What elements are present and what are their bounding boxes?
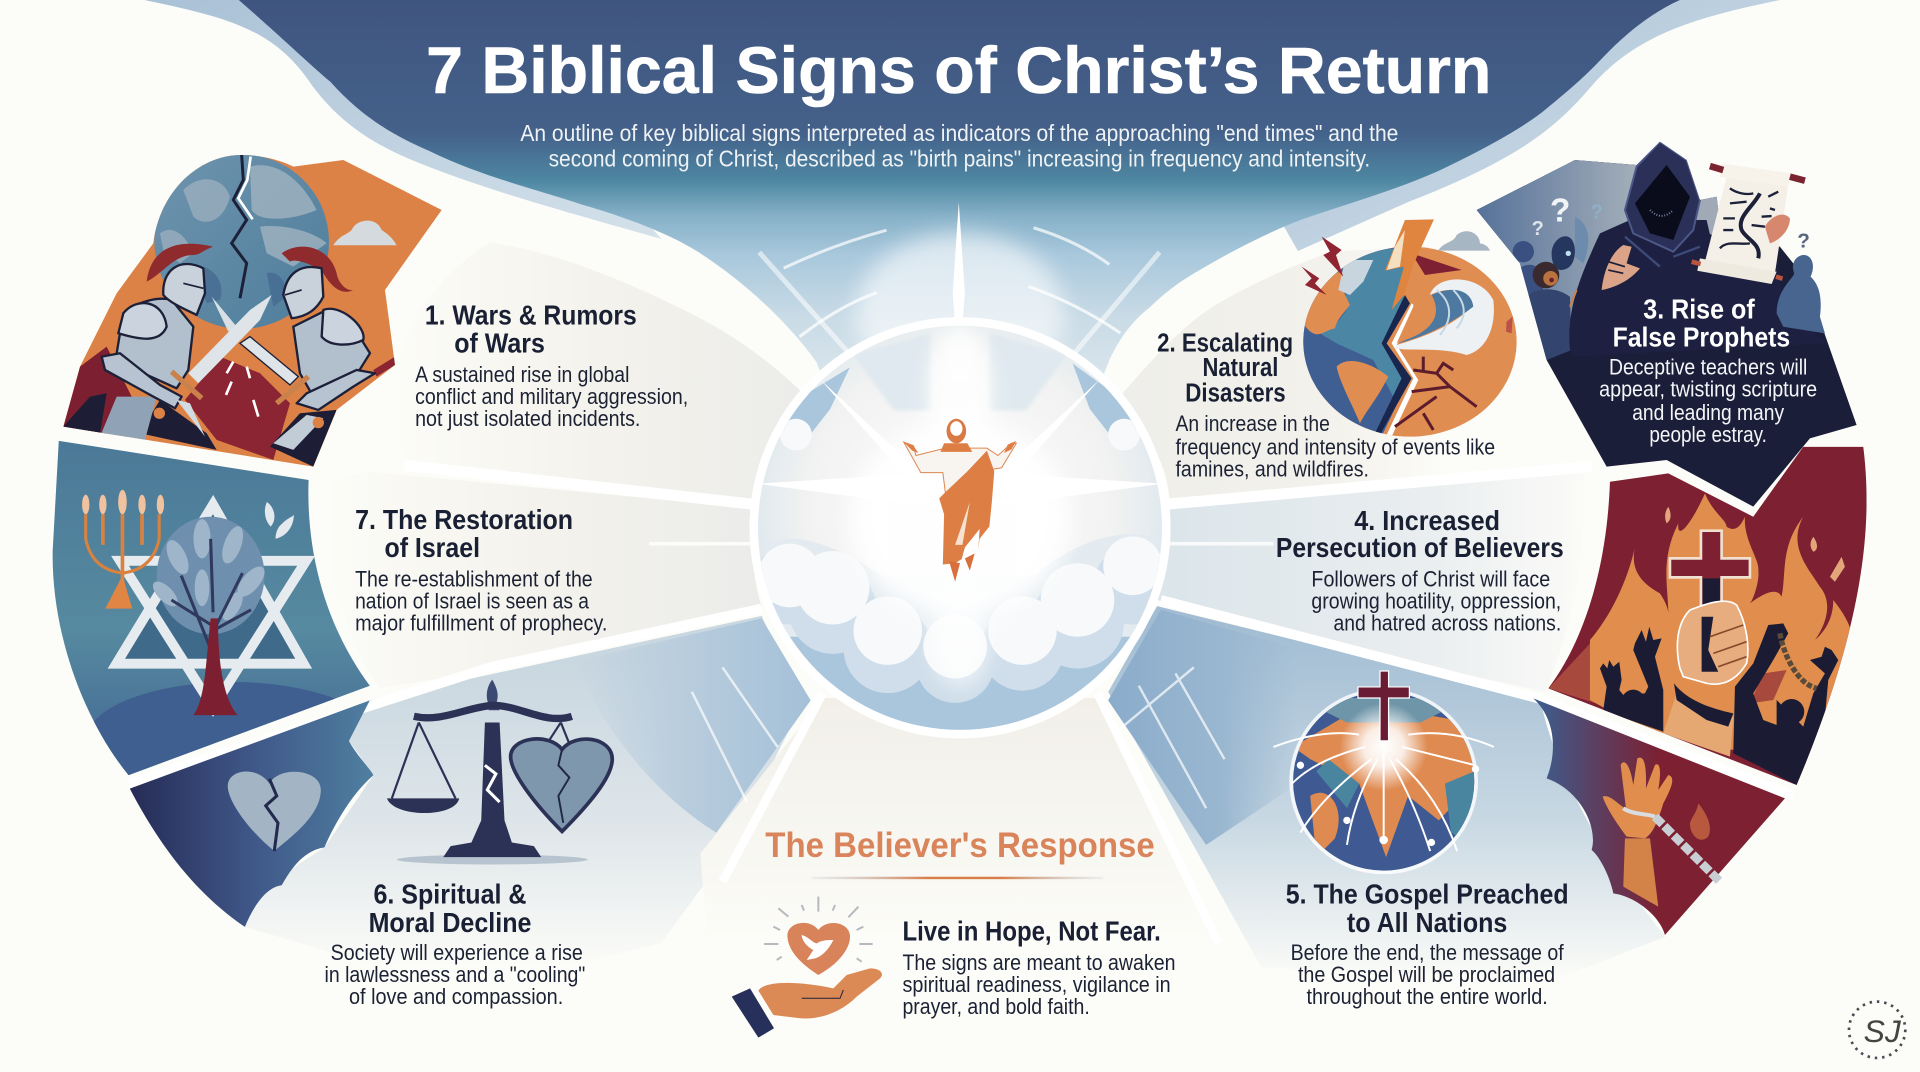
question marks: ? xyxy=(1550,193,1570,230)
text block: sign 1: of Wars xyxy=(454,328,545,359)
text block: sign 3: and leading many xyxy=(1632,400,1784,425)
icon: right knight xyxy=(273,247,375,450)
blue sky patches xyxy=(776,364,1143,730)
wedge panel: sign 7 backdrop xyxy=(321,471,762,688)
scroll xyxy=(1692,163,1805,284)
text block: sign 5: 5. The Gospel Preached xyxy=(1286,879,1569,910)
text block: sign 6: 6. Spiritual & xyxy=(373,879,527,910)
text block: sign 4: and hatred across nations. xyxy=(1333,611,1561,636)
text block: sign 6: of love and compassion. xyxy=(349,984,563,1009)
text block: sign 7: major fulfillment of prophecy. xyxy=(355,611,607,636)
cross xyxy=(1670,531,1750,610)
panel: sign 4 persecution illustration xyxy=(1548,446,1866,785)
text block: sign 5: the Gospel will be proclaimed xyxy=(1298,962,1555,987)
text block: sign 3: Deceptive teachers will xyxy=(1609,355,1807,380)
radiating lines xyxy=(1273,733,1494,851)
text block: sign 4 xyxy=(1276,505,1564,636)
blue stripe areas near the orb xyxy=(576,610,1298,845)
subtitle: second coming of Christ, described as "birth pains" increasing in frequency and intensity. xyxy=(549,146,1370,172)
text block: sign 3: appear, twisting scripture xyxy=(1599,377,1817,402)
wedge panel: sign 4 backdrop xyxy=(1157,471,1586,692)
heading: The Believer's Response: The Believer's Response xyxy=(765,825,1155,865)
globe: sign 2 natural disasters xyxy=(1300,219,1517,440)
text block: sign 4: growing hoatility, oppression, xyxy=(1311,589,1561,614)
crowd silhouettes xyxy=(1510,217,1588,360)
icon: olive tree xyxy=(149,517,269,715)
text block: sign 4: Persecution of Believers xyxy=(1276,532,1564,563)
text block: sign 4: 4. Increased xyxy=(1354,505,1500,536)
panel: sign 1 wars illustration xyxy=(60,150,447,470)
text block: sign 5: throughout the entire world. xyxy=(1307,984,1548,1009)
light rays above the orb xyxy=(759,202,1160,418)
icon: Christ figure xyxy=(904,419,1016,582)
text block: sign 5: to All Nations xyxy=(1347,907,1507,938)
radiant light xyxy=(757,324,1163,686)
title: 7 Biblical Signs of Christ’s Return xyxy=(426,34,1491,108)
icon: small cloud xyxy=(333,221,397,245)
text block: sign 2: An increase in the xyxy=(1176,411,1330,436)
text block: sign 1 xyxy=(415,299,688,431)
text block: sign 7: The re-establishment of the xyxy=(355,567,593,592)
icon: balance scale xyxy=(387,680,612,864)
text block: sign 5 xyxy=(1286,879,1569,1009)
text block: sign 2 xyxy=(1157,329,1495,481)
text block: sign 7: nation of Israel is seen as a xyxy=(355,589,590,614)
text block: sign 1: 1. Wars & Rumors xyxy=(425,299,637,330)
wedge panel: sign 1 backdrop xyxy=(391,242,814,500)
hooded figure xyxy=(1569,142,1710,350)
text block: sign 3: people estray. xyxy=(1649,422,1767,447)
text block: sign 6: in lawlessness and a "cooling" xyxy=(324,962,585,987)
text block: sign 7 xyxy=(355,504,607,636)
icon: chained hand xyxy=(1603,758,1720,907)
text block: sign 6 xyxy=(324,879,585,1009)
text block: sign 7: 7. The Restoration xyxy=(355,504,573,535)
header sky panel xyxy=(239,0,1680,441)
text block: believer's response: prayer, and bold faith. xyxy=(902,994,1090,1019)
text block: sign 5: Before the end, the message of xyxy=(1291,940,1564,965)
white divider strips xyxy=(129,465,1794,943)
question marks xyxy=(1532,193,1810,252)
wedge panel: believer's response backdrop xyxy=(700,698,1224,1071)
question marks: ? xyxy=(1532,218,1544,240)
text block: sign 3: 3. Rise of xyxy=(1643,293,1755,324)
wedge panel: sign 6 backdrop xyxy=(245,616,802,992)
text block: believer's response: The signs are meant to awaken xyxy=(902,950,1176,975)
right-hand bystander xyxy=(1777,255,1825,333)
icon: menorah xyxy=(82,490,164,609)
text block: sign 2: Natural xyxy=(1202,354,1278,382)
question marks: ? xyxy=(1797,229,1810,252)
icon: crossed swords xyxy=(172,295,308,437)
header band: light blue edge xyxy=(144,0,1780,251)
icon: broken heart xyxy=(228,771,321,851)
text block: believer's response xyxy=(902,915,1176,1019)
text block: sign 6: Society will experience a rise xyxy=(331,940,583,965)
text block: sign 6: Moral Decline xyxy=(369,907,531,938)
central orb with clouds and Christ figure xyxy=(747,317,1176,747)
text block: sign 1: A sustained rise in global xyxy=(415,362,629,387)
icon: cracked globe xyxy=(154,154,329,329)
raised fist and forearm xyxy=(1663,601,1817,757)
wedge panel: sign 2 backdrop xyxy=(1108,245,1592,502)
divider under response heading xyxy=(812,877,1103,879)
text block: believer's response: spiritual readiness, vigilance in xyxy=(902,972,1171,997)
icon: lightning bolts xyxy=(1385,219,1434,310)
text block: sign 7: of Israel xyxy=(384,532,480,563)
icon: cross xyxy=(1358,671,1409,741)
icon: hand holding heart and dove xyxy=(732,897,882,1038)
icon: leaves xyxy=(265,502,294,539)
subtitle xyxy=(520,120,1398,172)
text block: sign 2: 2. Escalating xyxy=(1157,329,1293,357)
text block: sign 3 xyxy=(1599,293,1817,447)
subtitle: An outline of key biblical signs interpreted as indicators of the approaching "end times" and the xyxy=(520,120,1398,146)
text block: sign 2: frequency and intensity of events like xyxy=(1176,434,1495,459)
icon: SJ monogram logo xyxy=(1849,1002,1905,1058)
text block: sign 4: Followers of Christ will face xyxy=(1311,567,1550,592)
icon: cloud xyxy=(1438,231,1490,251)
question marks: ? xyxy=(1591,201,1603,223)
globe: sign 5 gospel xyxy=(1273,671,1494,874)
text block: sign 1: conflict and military aggression, xyxy=(415,384,688,409)
text block: sign 2: famines, and wildfires. xyxy=(1176,456,1369,481)
text block: sign 3: False Prophets xyxy=(1613,322,1790,353)
text block: believer's response: Live in Hope, Not Fear. xyxy=(902,915,1161,946)
wedge panel: sign 5 backdrop xyxy=(1108,606,1665,980)
panel: sign 3 false prophet illustration xyxy=(1476,142,1856,506)
text block: sign 2: Disasters xyxy=(1185,380,1286,408)
icon: left knight xyxy=(100,244,213,440)
panel: sign 5 maroon illustration xyxy=(1533,698,1785,935)
flames xyxy=(1590,493,1853,750)
icon: SJ monogram logo: SJ xyxy=(1864,1013,1902,1049)
clouds xyxy=(760,554,1160,703)
icon: star of David xyxy=(116,504,306,708)
panel: sign 6 dark cloud panel xyxy=(130,700,373,927)
text block: sign 1: not just isolated incidents. xyxy=(415,406,640,431)
silhouettes raised hands xyxy=(1600,623,1838,785)
panel: sign 7 Israel illustration xyxy=(52,441,370,776)
